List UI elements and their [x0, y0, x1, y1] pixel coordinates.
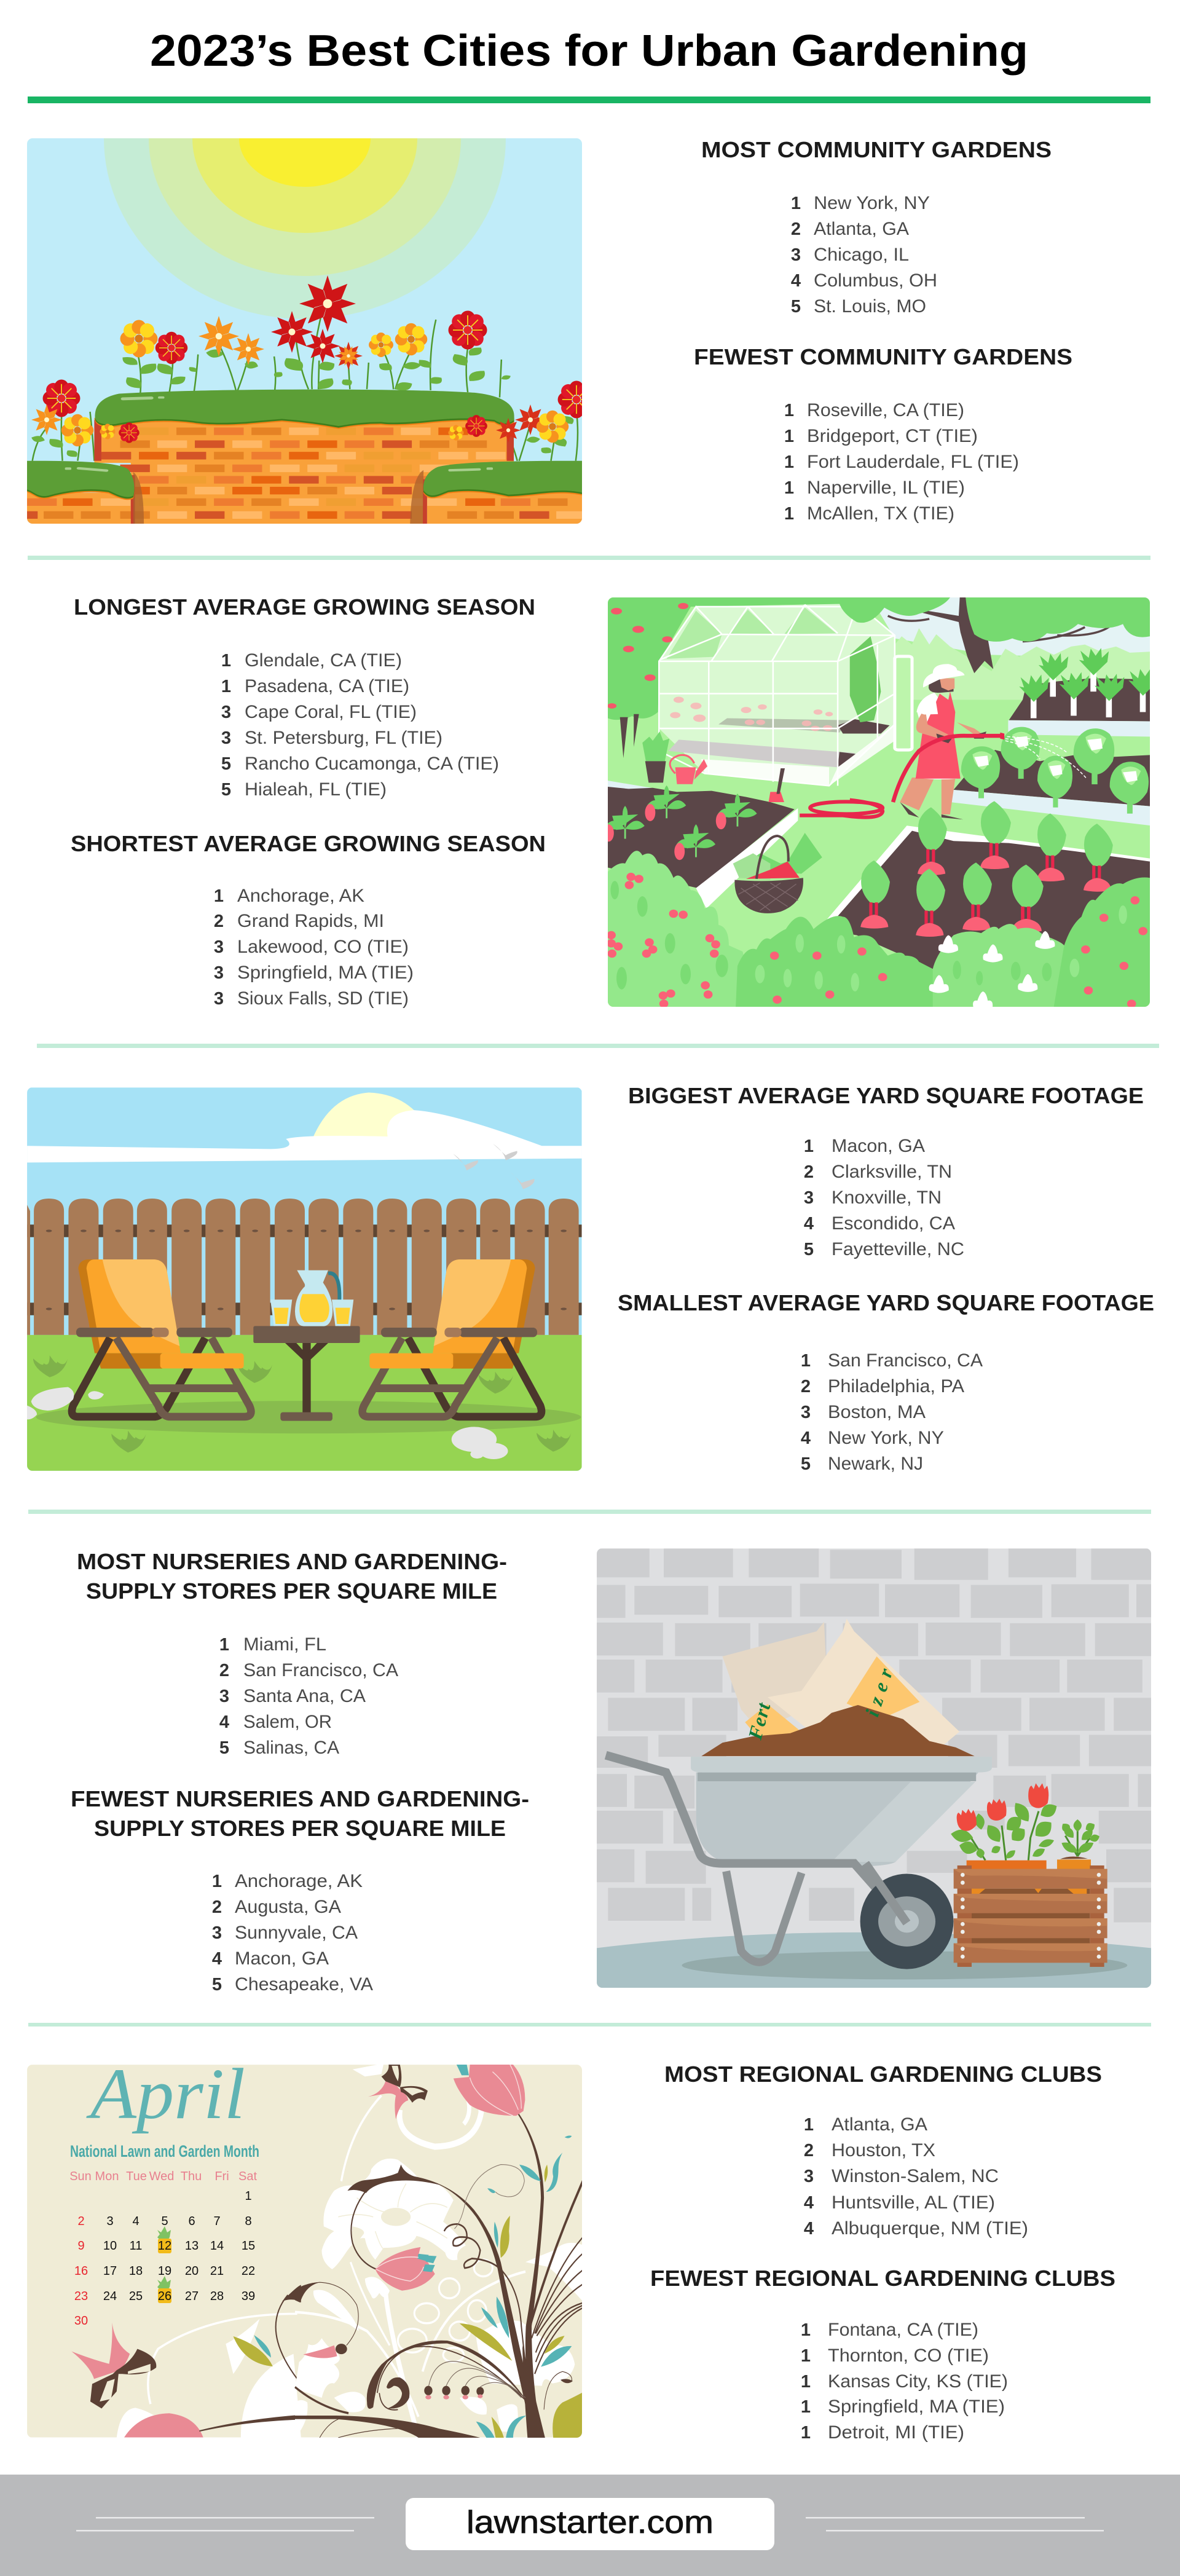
list: longest average growing season: 5	[221, 780, 231, 800]
list: smallest average yard: Boston, MA	[828, 1402, 926, 1422]
butterfly top	[368, 2065, 428, 2119]
calendar weekday headers: Sat	[238, 2170, 257, 2183]
list: most regional gardening clubs: 4	[804, 2219, 814, 2239]
crate	[954, 1865, 1107, 1967]
calendar dates: 26	[158, 2290, 171, 2303]
list: fewest regional gardening clubs: Detroit, MI (TIE)	[828, 2422, 964, 2443]
list: fewest community gardens: McAllen, TX (TIE)	[807, 503, 954, 524]
list: biggest average yard: Knoxville, TN	[832, 1188, 942, 1208]
list: most community gardens	[791, 193, 937, 317]
list: most nurseries	[219, 1634, 398, 1758]
grass tufts	[33, 1355, 571, 1452]
icon: sun behind cloud	[312, 1093, 418, 1139]
calendar dates: 1	[245, 2189, 252, 2203]
greenhouse	[659, 604, 912, 786]
calendar dates: 3	[106, 2215, 114, 2228]
tree left	[607, 597, 843, 758]
fence	[27, 1199, 582, 1335]
list: most nurseries: 2	[219, 1661, 229, 1680]
harvest basket	[733, 833, 822, 913]
list: fewest regional gardening clubs: Fontana, CA (TIE)	[828, 2320, 978, 2340]
list: biggest average yard: 5	[804, 1240, 814, 1259]
soil	[701, 1705, 975, 1756]
list: most nurseries: San Francisco, CA	[243, 1660, 398, 1680]
list: longest average growing season: 5	[221, 754, 231, 774]
panel: illustration flowers on brick wall	[27, 138, 582, 524]
list: biggest average yard: 3	[804, 1188, 814, 1208]
list: longest average growing season: 3	[221, 728, 231, 748]
list: fewest nurseries: 3	[212, 1923, 222, 1943]
list: most regional gardening clubs: Huntsville, AL (TIE)	[832, 2192, 995, 2213]
side table	[253, 1326, 360, 1421]
list: shortest average growing season: 3	[214, 989, 224, 1009]
floral artwork right	[295, 2065, 584, 2438]
list: most community gardens: 4	[791, 271, 801, 291]
list: fewest nurseries: Chesapeake, VA	[235, 1974, 373, 1995]
calendar dates	[74, 2189, 255, 2328]
list: smallest average yard: 4	[801, 1428, 811, 1448]
heading: fewest nurseries: SUPPLY STORES PER SQUARE MILE	[94, 1816, 506, 1841]
list: fewest community gardens: 1	[784, 427, 794, 446]
flowers	[31, 275, 595, 446]
list: most nurseries: Salem, OR	[243, 1712, 332, 1732]
panel: illustration backyard with lounge chairs	[27, 1087, 582, 1471]
calendar dates: 27	[185, 2290, 199, 2303]
left strawberry bed	[604, 768, 798, 908]
calendar dates: 11	[130, 2239, 142, 2253]
calendar weekday headers	[69, 2170, 257, 2183]
list: most nurseries: Santa Ana, CA	[243, 1686, 366, 1706]
calendar dates: 7	[213, 2215, 221, 2228]
green moss top	[27, 390, 582, 500]
list: longest average growing season: Hialeah, FL (TIE)	[245, 779, 387, 800]
list: longest average growing season: St. Petersburg, FL (TIE)	[245, 728, 442, 748]
list: biggest average yard: 2	[804, 1162, 814, 1182]
calendar dates: 22	[242, 2264, 255, 2278]
list: most community gardens: 5	[791, 297, 801, 317]
list: fewest community gardens	[784, 400, 1019, 524]
list: longest average growing season: Glendale, CA (TIE)	[245, 650, 402, 671]
brick wall with stems	[8, 304, 586, 529]
list: most community gardens: Columbus, OH	[814, 270, 937, 291]
calendar dates: 28	[210, 2290, 224, 2303]
list: fewest community gardens: 1	[784, 504, 794, 524]
list: shortest average growing season: Springfield, MA (TIE)	[237, 963, 414, 983]
back vegetable beds with leeks and cabbages	[950, 648, 1158, 825]
list: most nurseries: Salinas, CA	[243, 1738, 339, 1758]
right tree	[840, 597, 1150, 673]
list: longest average growing season	[221, 650, 499, 800]
list: fewest regional gardening clubs: Springfield, MA (TIE)	[828, 2397, 1005, 2417]
list: shortest average growing season: 2	[214, 912, 224, 931]
list: fewest regional gardening clubs: Kansas City, KS (TIE)	[828, 2371, 1008, 2392]
list: most nurseries: Miami, FL	[243, 1634, 326, 1655]
list: shortest average growing season: Anchorage, AK	[237, 886, 364, 906]
list: fewest nurseries: Anchorage, AK	[235, 1871, 363, 1891]
list: fewest nurseries	[212, 1871, 373, 1995]
right lounge chair	[363, 1259, 541, 1417]
list: most community gardens: 1	[791, 194, 801, 213]
list: fewest nurseries: Augusta, GA	[235, 1897, 341, 1917]
calendar dates: 10	[103, 2239, 117, 2253]
garden hose	[800, 733, 1087, 817]
list: most community gardens: 2	[791, 219, 801, 239]
list: most community gardens: New York, NY	[814, 193, 930, 213]
list: fewest nurseries: 2	[212, 1897, 222, 1917]
rocks left, table and lemonade	[27, 1270, 360, 1421]
lemonade pitcher and glasses	[270, 1270, 353, 1326]
calendar dates: 30	[74, 2314, 88, 2328]
teal and olive leaves	[460, 2135, 584, 2438]
list: longest average growing season: Rancho Cucamonga, CA (TIE)	[245, 754, 499, 774]
heading: most nurseries	[77, 1549, 507, 1604]
calendar weekday headers: Fri	[214, 2170, 229, 2183]
heading: most community gardens: MOST COMMUNITY GARDENS	[701, 137, 1052, 162]
calendar weekday headers: Sun	[69, 2170, 92, 2183]
calendar dates: 15	[242, 2239, 255, 2253]
calendar weekday headers: Mon	[95, 2170, 119, 2183]
calendar weekday headers: Tue	[126, 2170, 147, 2183]
title: 2023’s Best Cities for Urban Gardening	[150, 26, 1028, 76]
list: longest average growing season: Pasadena, CA (TIE)	[245, 676, 409, 696]
list: biggest average yard: Escondido, CA	[832, 1213, 955, 1234]
panel: illustration April calendar	[27, 2054, 584, 2438]
calendar dates: 5	[161, 2215, 168, 2228]
left background and butterfly	[27, 2065, 583, 2437]
list: fewest community gardens: Bridgeport, CT (TIE)	[807, 426, 978, 446]
list: most regional gardening clubs: 3	[804, 2167, 814, 2186]
list: fewest regional gardening clubs: 1	[801, 2423, 811, 2443]
birds	[453, 1144, 535, 1189]
list: most community gardens: 3	[791, 245, 801, 265]
heading: most regional gardening clubs: MOST REGIONAL GARDENING CLUBS	[664, 2062, 1102, 2087]
list: smallest average yard	[801, 1350, 983, 1474]
list: fewest community gardens: 1	[784, 452, 794, 472]
list: shortest average growing season: Sioux Falls, SD (TIE)	[237, 988, 409, 1009]
list: smallest average yard: 5	[801, 1454, 811, 1474]
list: fewest nurseries: Macon, GA	[235, 1948, 329, 1969]
list: most regional gardening clubs: Albuquerque, NM (TIE)	[832, 2218, 1028, 2239]
heading: smallest average yard: SMALLEST AVERAGE YARD SQUARE FOOTAGE	[618, 1290, 1154, 1315]
heading: longest average growing season: LONGEST AVERAGE GROWING SEASON	[74, 594, 535, 620]
heading: fewest nurseries	[71, 1786, 529, 1841]
list: smallest average yard: 1	[801, 1351, 811, 1371]
list: longest average growing season: Cape Coral, FL (TIE)	[245, 702, 417, 722]
rocks right	[452, 1427, 508, 1459]
panel: illustration vegetable garden with greenhouse	[604, 597, 1158, 1009]
calendar dates: 23	[74, 2290, 88, 2303]
calendar dates: 17	[103, 2264, 117, 2278]
butterfly lower left	[71, 2323, 156, 2409]
footer brand text: lawnstarter.com	[466, 2505, 714, 2540]
list: fewest community gardens: 1	[784, 478, 794, 498]
list: biggest average yard: 1	[804, 1136, 814, 1156]
list: biggest average yard: 4	[804, 1214, 814, 1234]
list: smallest average yard: 3	[801, 1403, 811, 1422]
front right bed with beets	[819, 801, 1150, 987]
heading: biggest average yard: BIGGEST AVERAGE YARD SQUARE FOOTAGE	[628, 1083, 1144, 1108]
list: fewest community gardens: Roseville, CA (TIE)	[807, 400, 964, 420]
wall base	[27, 418, 582, 524]
list: most nurseries: 1	[219, 1635, 229, 1655]
list: most regional gardening clubs: Winston-Salem, NC	[832, 2166, 999, 2186]
bag labels	[744, 1665, 897, 1743]
list: shortest average growing season: Grand Rapids, MI	[237, 911, 384, 931]
hanging buds	[424, 2386, 484, 2400]
heading: fewest nurseries: FEWEST NURSERIES AND GARDENING-	[71, 1786, 529, 1811]
bag labels: Fert	[744, 1700, 775, 1743]
calendar subtitle: National Lawn and Garden Month	[70, 2142, 259, 2160]
calendar weekday headers: Thu	[181, 2170, 202, 2183]
green title rule	[28, 97, 1150, 103]
list: most regional gardening clubs: Houston, TX	[832, 2140, 935, 2160]
ground	[597, 1932, 1151, 1988]
calendar dates: 19	[158, 2264, 171, 2278]
icon: sun	[104, 138, 506, 319]
calendar dates: 25	[129, 2290, 143, 2303]
calendar dates: 2	[77, 2215, 85, 2228]
wheelbarrow	[606, 1755, 992, 1969]
list: longest average growing season: 3	[221, 703, 231, 722]
list: smallest average yard: 2	[801, 1377, 811, 1396]
footer logo pill	[406, 2498, 774, 2550]
list: most community gardens: Chicago, IL	[814, 245, 909, 265]
list: biggest average yard: Fayetteville, NC	[832, 1239, 964, 1259]
list: most nurseries: 5	[219, 1738, 229, 1758]
calendar dates: 14	[210, 2239, 224, 2253]
list: smallest average yard: New York, NY	[828, 1428, 944, 1448]
potted plant and watering can	[642, 731, 707, 784]
fertilizer bags	[723, 1619, 959, 1747]
list: smallest average yard: Newark, NJ	[828, 1454, 923, 1474]
list: most community gardens: Atlanta, GA	[814, 219, 909, 239]
flowers in pots and wooden crate	[950, 1783, 1107, 1967]
list: most regional gardening clubs: 2	[804, 2141, 814, 2160]
list: shortest average growing season: 3	[214, 937, 224, 957]
calendar dates: 6	[188, 2215, 195, 2228]
footer	[0, 2475, 1180, 2576]
list: biggest average yard	[804, 1136, 964, 1259]
pink tulips	[303, 2065, 525, 2358]
list: most regional gardening clubs: 1	[804, 2115, 814, 2135]
potted flowers	[950, 1783, 1101, 1873]
calendar dates: 24	[103, 2290, 117, 2303]
heading: fewest community gardens: FEWEST COMMUNITY GARDENS	[694, 344, 1072, 369]
list: shortest average growing season: Lakewood, CO (TIE)	[237, 937, 409, 957]
list: biggest average yard: Macon, GA	[832, 1136, 925, 1156]
cloud	[27, 1110, 582, 1162]
front bushes with berries	[607, 851, 1150, 1009]
list: fewest regional gardening clubs: 1	[801, 2397, 811, 2417]
calendar plant markers	[157, 2226, 171, 2303]
lawn	[27, 1335, 582, 1471]
list: most regional gardening clubs: 4	[804, 2193, 814, 2213]
list: longest average growing season: 1	[221, 677, 231, 696]
list: most regional gardening clubs: Atlanta, GA	[832, 2114, 927, 2135]
calendar dates: 18	[129, 2264, 143, 2278]
calendar dates: 20	[185, 2264, 199, 2278]
heading: fewest regional gardening clubs: FEWEST REGIONAL GARDENING CLUBS	[650, 2266, 1115, 2291]
calendar dates: 9	[77, 2239, 85, 2253]
calendar dates: 39	[242, 2290, 255, 2303]
list: fewest nurseries: 1	[212, 1872, 222, 1891]
brown stems and swirls	[295, 2111, 584, 2438]
panel: illustration wheelbarrow and brick wall	[597, 1548, 1151, 1988]
brick wall	[597, 1548, 1151, 1923]
list: shortest average growing season: 3	[214, 963, 224, 983]
list: fewest community gardens: 1	[784, 401, 794, 420]
list: fewest nurseries: 4	[212, 1949, 222, 1969]
list: shortest average growing season	[214, 886, 414, 1009]
sky and far grass	[870, 597, 1150, 659]
list: most community gardens: St. Louis, MO	[814, 296, 926, 317]
list: smallest average yard: Philadelphia, PA	[828, 1376, 964, 1396]
list: fewest regional gardening clubs: Thornton, CO (TIE)	[828, 2346, 989, 2366]
list: smallest average yard: San Francisco, CA	[828, 1350, 983, 1371]
calendar dates: 13	[185, 2239, 199, 2253]
list: shortest average growing season: 1	[214, 886, 224, 906]
calendar dates: 8	[245, 2215, 252, 2228]
white floral background	[295, 2065, 584, 2438]
April script: April	[86, 2054, 245, 2134]
list: fewest regional gardening clubs: 1	[801, 2372, 811, 2392]
list: most nurseries: 3	[219, 1687, 229, 1706]
heading: most nurseries: SUPPLY STORES PER SQUARE MILE	[86, 1578, 497, 1604]
list: fewest community gardens: Fort Lauderdale, FL (TIE)	[807, 452, 1019, 472]
list: longest average growing season: 1	[221, 651, 231, 671]
gardener	[900, 664, 986, 819]
list: fewest community gardens: Naperville, IL (TIE)	[807, 478, 965, 498]
list: fewest regional gardening clubs: 1	[801, 2320, 811, 2340]
bag labels: izer	[860, 1665, 897, 1719]
calendar dates: 16	[74, 2264, 88, 2278]
heading: most nurseries: MOST NURSERIES AND GARDENING-	[77, 1549, 507, 1574]
calendar weekday headers: Wed	[149, 2170, 174, 2183]
list: fewest nurseries: Sunnyvale, CA	[235, 1923, 358, 1943]
list: fewest nurseries: 5	[212, 1975, 222, 1995]
heading: shortest average growing season: SHORTEST AVERAGE GROWING SEASON	[71, 831, 546, 856]
list: most nurseries: 4	[219, 1712, 229, 1732]
list: biggest average yard: Clarksville, TN	[832, 1162, 952, 1182]
calendar dates: 12	[158, 2239, 171, 2253]
rocks	[27, 1387, 104, 1419]
list: most regional gardening clubs	[804, 2114, 1028, 2239]
calendar dates: 4	[132, 2215, 140, 2228]
list: fewest regional gardening clubs	[801, 2320, 1008, 2443]
left lounge chair	[72, 1259, 251, 1417]
list: fewest regional gardening clubs: 1	[801, 2346, 811, 2366]
calendar dates: 21	[210, 2264, 224, 2278]
